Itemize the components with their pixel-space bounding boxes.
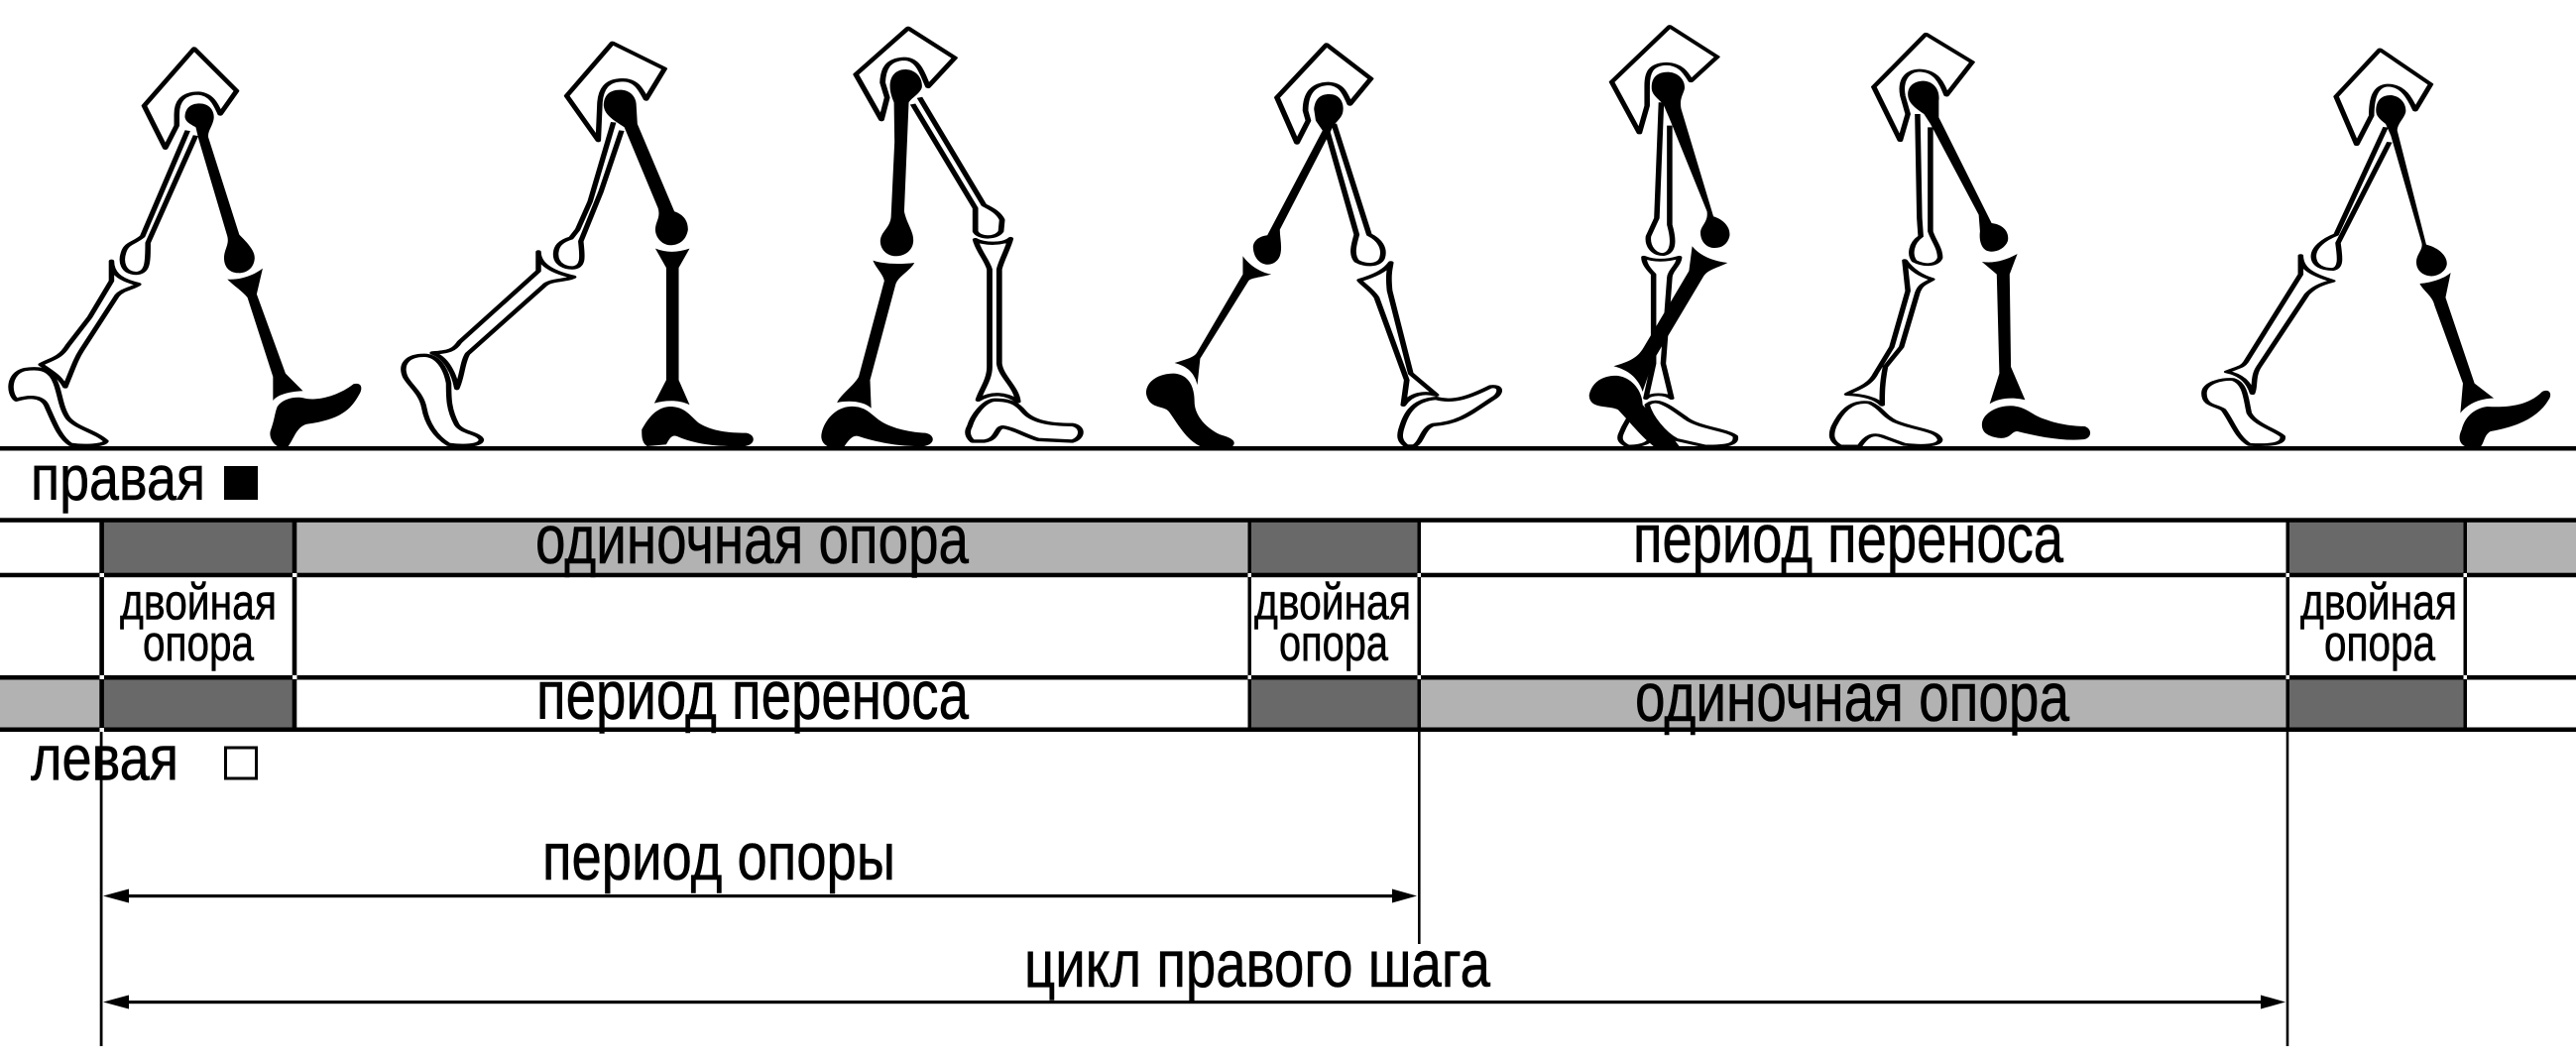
right tibia — [1982, 254, 2025, 404]
left femur — [913, 97, 1002, 237]
legend: left leg — [31, 722, 256, 793]
left foot — [1400, 387, 1499, 446]
label: double support 3 — [2300, 573, 2457, 671]
grid crossing gaps — [99, 573, 2467, 732]
label: double support 3: опора — [2324, 615, 2436, 671]
right leg phase row — [101, 521, 2576, 575]
left femur — [1327, 124, 1383, 265]
label: double support 2: двойная — [1254, 573, 1411, 631]
left foot — [2204, 380, 2283, 445]
right foot — [642, 407, 754, 446]
left tibia — [976, 239, 1018, 402]
left foot — [968, 400, 1081, 441]
right foot — [1982, 406, 2090, 440]
left femur — [122, 131, 195, 274]
left femur — [1648, 102, 1673, 255]
cycle boundary line: start — [100, 732, 103, 1046]
pelvis — [856, 28, 955, 120]
left leg phase row — [0, 678, 2465, 730]
left femur — [2313, 127, 2390, 270]
gait figure 5: legs crossing — [1589, 27, 1735, 446]
right femur — [184, 103, 255, 273]
left heel behind right foot — [1620, 416, 1650, 446]
left foot — [11, 369, 106, 445]
arrow: stance period — [103, 888, 1417, 902]
left tibia — [1846, 261, 1932, 405]
black square — [224, 466, 258, 500]
label: double support 2 — [1254, 573, 1411, 671]
label: double support 3: двойная — [2300, 573, 2457, 631]
right femur — [880, 69, 922, 256]
right femur — [604, 90, 688, 245]
label: swing period, right row: период переноса — [1633, 500, 2063, 577]
gait figure 7: cycle returns to start — [2204, 50, 2550, 446]
cycle boundary line: end of stance — [1418, 732, 1421, 944]
left femur — [1912, 114, 1940, 265]
gait figure 2: right foot flat, left heel lifting — [404, 43, 754, 446]
label: right: правая — [31, 442, 205, 514]
label: double support 1: опора — [143, 615, 255, 671]
legend: right leg — [31, 442, 258, 514]
white square — [226, 748, 256, 778]
label: double support 1: двойная — [120, 573, 277, 631]
right femur — [1908, 81, 2008, 252]
label: single support, right row: одиночная опора — [535, 501, 969, 578]
arrow: right step cycle — [103, 996, 2285, 1009]
left tibia — [2227, 256, 2333, 394]
label: swing period, left row: период переноса — [536, 656, 969, 734]
right foot — [270, 384, 361, 446]
gait figure 1: both feet in double support — [11, 49, 361, 446]
right foot — [821, 407, 933, 446]
left foot — [404, 355, 481, 445]
right tibia — [1613, 246, 1727, 392]
right tibia — [654, 249, 689, 405]
label: double support 1 — [120, 573, 277, 671]
left tibia — [1359, 263, 1437, 405]
table grid — [0, 518, 2576, 732]
right femur — [2376, 95, 2447, 276]
cycle boundary line: end of cycle — [2286, 732, 2288, 1046]
right tibia — [837, 261, 914, 409]
right tibia — [227, 269, 303, 401]
gait figure 4: second double support — [1146, 45, 1499, 446]
right foot — [2460, 391, 2550, 446]
pelvis — [1277, 45, 1371, 143]
right tibia — [2419, 273, 2494, 413]
right femur — [1253, 94, 1344, 265]
left foot — [1647, 402, 1735, 446]
pelvis — [567, 43, 664, 141]
label: stance period: период опоры — [542, 819, 895, 894]
pelvis — [1874, 34, 1972, 141]
pelvis — [144, 49, 237, 148]
left tibia — [41, 261, 139, 387]
left foot — [1832, 403, 1940, 446]
label: right step cycle: цикл правого шага — [1024, 927, 1491, 1002]
gait figure 3: right leg in single support — [821, 28, 1081, 446]
label: left: левая — [31, 722, 178, 793]
right foot — [1589, 376, 1680, 446]
pelvis — [2336, 50, 2430, 145]
gait figure 6: left leg stance, right foot swinging — [1832, 34, 2090, 446]
label: single support, left row: одиночная опора — [1635, 658, 2069, 736]
left tibia — [1644, 257, 1680, 399]
left femur — [556, 122, 622, 268]
ground line — [0, 446, 2576, 450]
right femur — [1652, 72, 1729, 248]
right foot — [1146, 374, 1234, 446]
label: double support 2: опора — [1279, 615, 1388, 671]
pelvis — [1611, 27, 1717, 133]
right tibia — [1175, 256, 1271, 385]
gait phase table — [0, 500, 2576, 736]
left tibia — [432, 252, 574, 389]
